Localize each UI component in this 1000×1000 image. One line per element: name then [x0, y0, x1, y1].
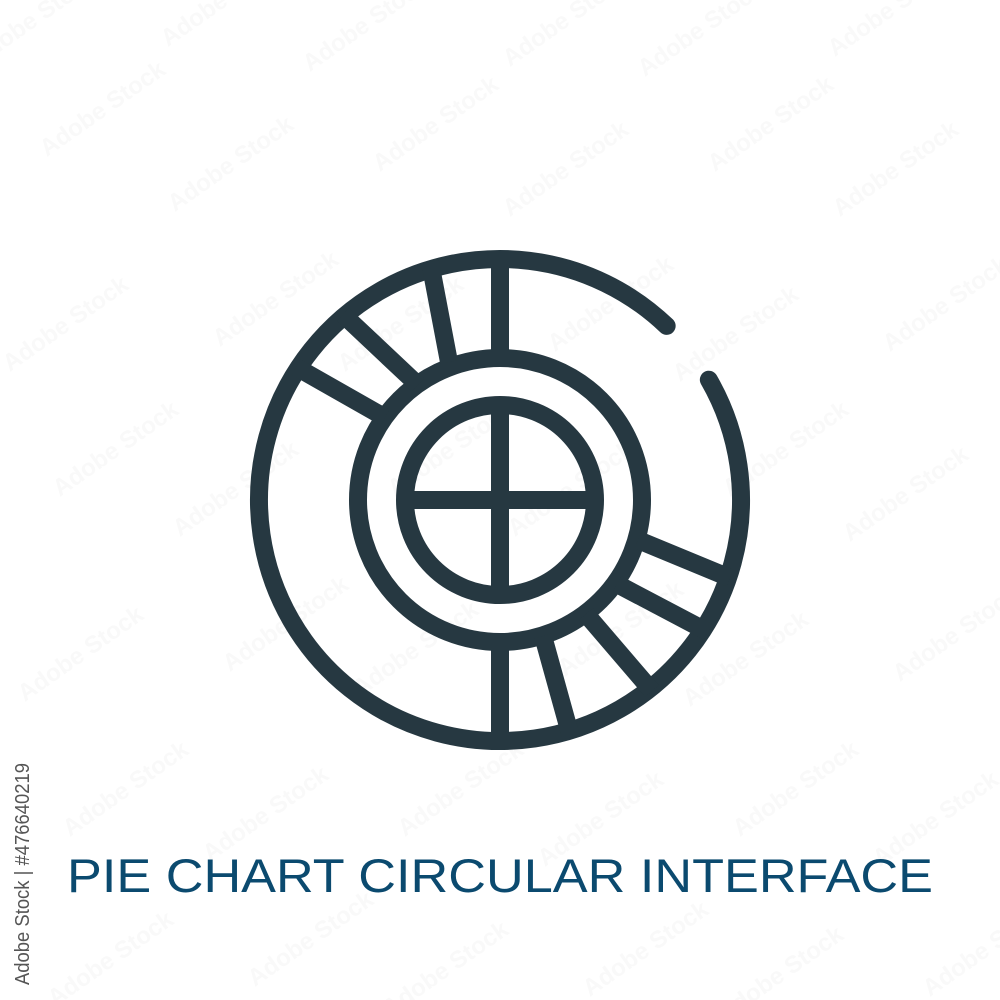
watermark pattern: Adobe Stock — [198, 760, 334, 867]
icon: pie chart circular interface — [171, 171, 829, 829]
upper-left segment spokes — [296, 259, 500, 418]
lower-right segment spokes — [500, 540, 730, 741]
watermark pattern: Adobe Stock — [333, 270, 469, 377]
watermark pattern: Adobe Stock — [368, 70, 504, 177]
watermark pattern: Adobe Stock — [828, 115, 964, 222]
watermark pattern: Adobe Stock — [498, 115, 634, 222]
watermark pattern: Adobe Stock — [678, 605, 814, 712]
watermark pattern: Adobe Stock — [668, 280, 804, 387]
watermark pattern: Adobe Stock — [35, 55, 171, 162]
side credit: Adobe Stock | #476640219 — [12, 763, 34, 985]
watermark pattern: Adobe Stock — [218, 570, 354, 677]
watermark pattern: Adobe Stock — [728, 735, 864, 842]
title: PIE CHART CIRCULAR INTERFACE — [67, 849, 933, 902]
watermark pattern: Adobe Stock — [168, 435, 304, 542]
watermark pattern: Adobe Stock — [208, 245, 344, 352]
watermark pattern: Adobe Stock — [393, 735, 529, 842]
middle ring — [358, 358, 642, 642]
watermark pattern: Adobe Stock — [718, 395, 854, 502]
watermark pattern: Adobe Stock — [348, 595, 484, 702]
watermark pattern: Adobe Stock — [703, 70, 839, 177]
watermark pattern: Adobe Stock — [868, 765, 1000, 872]
watermark pattern: Adobe Stock — [503, 435, 639, 542]
watermark pattern: Adobe Stock — [13, 600, 149, 707]
watermark pattern: Adobe Stock — [163, 110, 299, 217]
watermark pattern: Adobe Stock — [543, 250, 679, 357]
watermark pattern: Adobe Stock — [838, 440, 974, 547]
inner circle with cross — [405, 405, 595, 595]
watermark pattern: Adobe Stock — [383, 395, 519, 502]
watermark pattern: Adobe Stock — [48, 395, 184, 502]
watermark pattern: Adobe Stock — [0, 270, 134, 377]
watermark pattern: Adobe Stock — [243, 885, 379, 992]
watermark pattern: Adobe Stock — [58, 735, 194, 842]
outer open ring — [171, 171, 829, 829]
watermark pattern: Adobe Stock — [533, 765, 669, 872]
watermark pattern: Adobe Stock — [578, 895, 714, 1000]
watermark pattern: Adobe Stock — [553, 575, 689, 682]
